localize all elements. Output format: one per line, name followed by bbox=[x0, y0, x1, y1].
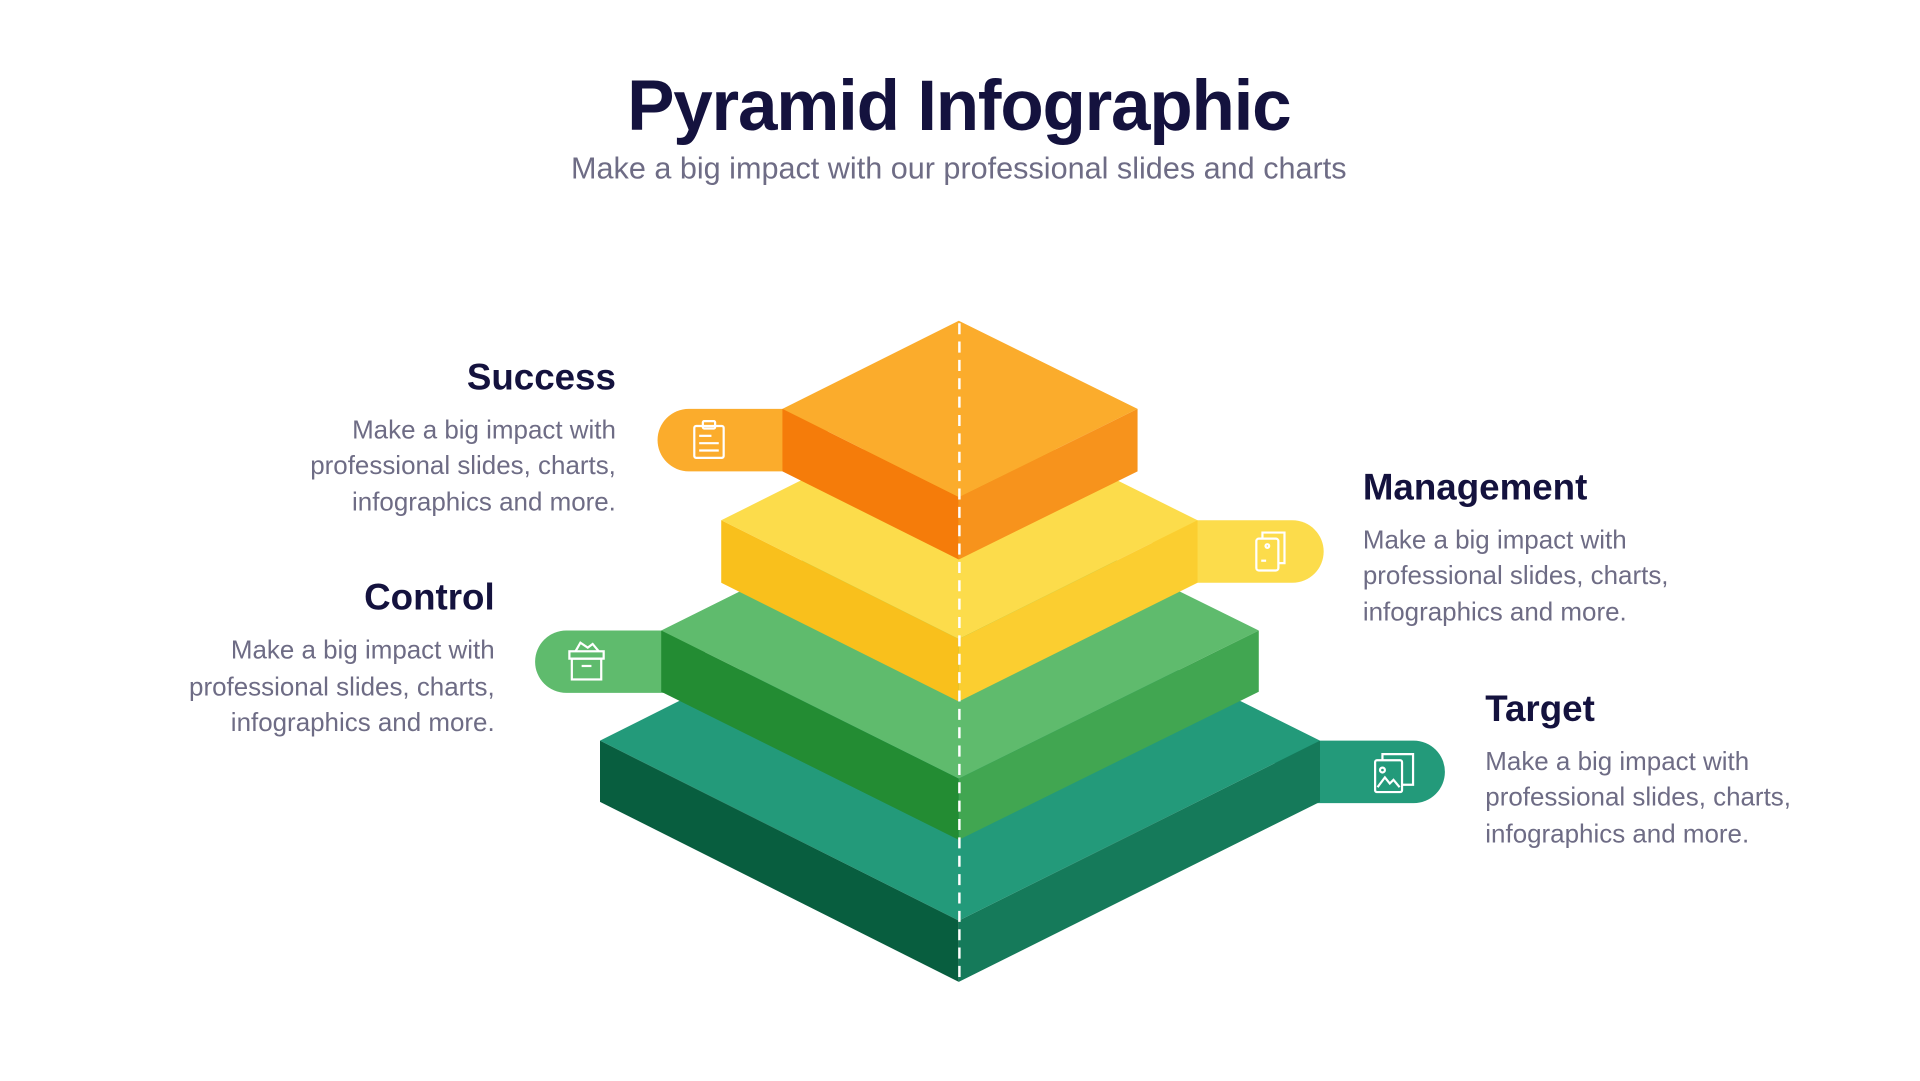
text: success: infographics and more. bbox=[352, 489, 616, 517]
text: success: Success bbox=[467, 356, 616, 397]
text: management: professional slides, charts, bbox=[1363, 562, 1669, 590]
text: management: Make a big impact with bbox=[1363, 526, 1627, 554]
text: success bbox=[310, 356, 616, 517]
title: Pyramid Infographic bbox=[627, 67, 1290, 146]
text: target: Make a big impact with bbox=[1485, 748, 1749, 776]
layer: success (orange) bbox=[658, 321, 1138, 559]
text: target: infographics and more. bbox=[1485, 820, 1749, 848]
dashed center line bbox=[958, 323, 960, 982]
layer: target (teal) bbox=[600, 561, 1445, 982]
icon: clipboard bbox=[694, 421, 724, 458]
layer: control (green) bbox=[535, 482, 1259, 840]
text: control: Make a big impact with bbox=[231, 637, 495, 665]
text: success: professional slides, charts, bbox=[310, 452, 616, 480]
text: control: Control bbox=[364, 577, 495, 618]
text: control: professional slides, charts, bbox=[189, 673, 495, 701]
text: target bbox=[1485, 688, 1791, 848]
text: control: infographics and more. bbox=[231, 709, 495, 737]
text: control bbox=[189, 577, 495, 737]
subtitle: Make a big impact with our professional slides and charts bbox=[571, 152, 1347, 186]
icon: box bbox=[569, 643, 604, 679]
icon: phone bbox=[1256, 533, 1284, 570]
layer: management (yellow) bbox=[721, 402, 1324, 701]
text: management bbox=[1363, 466, 1669, 627]
text: target: professional slides, charts, bbox=[1485, 784, 1791, 812]
text: management: infographics and more. bbox=[1363, 599, 1627, 627]
text: success: Make a big impact with bbox=[352, 416, 616, 444]
text: management: Management bbox=[1363, 466, 1587, 507]
text: target: Target bbox=[1485, 688, 1595, 729]
icon: image bbox=[1375, 754, 1413, 792]
